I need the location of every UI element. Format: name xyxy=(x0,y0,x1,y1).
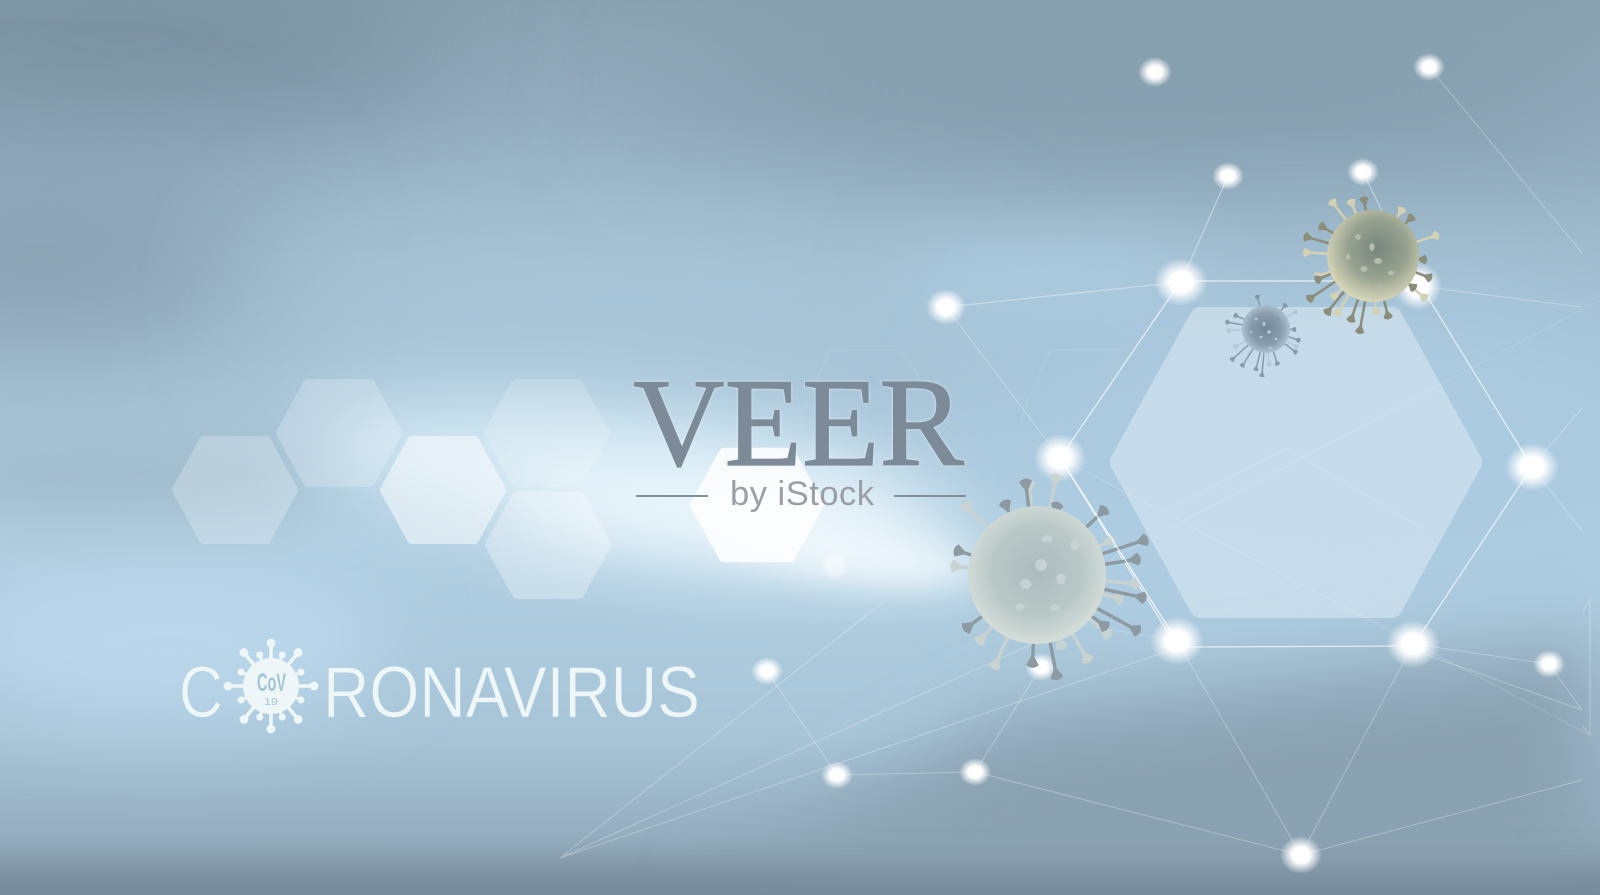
VEER wordmark: VEER xyxy=(633,354,964,493)
medium virus xyxy=(1302,196,1440,335)
coronavirus logo xyxy=(179,639,700,733)
hexagon 4 xyxy=(489,384,605,482)
hexagon 2 xyxy=(281,384,397,482)
hexagon 3 xyxy=(385,441,501,539)
large virus xyxy=(950,473,1150,681)
network nodes xyxy=(751,53,1565,874)
hexagon 5 xyxy=(490,496,606,594)
icon: CoV-19 virus: 19 xyxy=(264,697,279,708)
VEER watermark xyxy=(633,354,966,513)
rule left xyxy=(636,495,708,497)
large translucent hexagon xyxy=(1122,319,1470,606)
by iStock: by iStock xyxy=(730,475,875,513)
bright hexagon xyxy=(696,453,818,557)
bright hexagon outline xyxy=(946,172,1532,647)
rule right xyxy=(894,495,966,497)
line over large virus xyxy=(1060,458,1177,641)
hexagon 1 xyxy=(177,441,293,539)
letter C: C xyxy=(179,653,223,733)
small hexagons group xyxy=(177,384,818,594)
faint network lines xyxy=(560,67,1600,858)
small virus xyxy=(1225,294,1301,377)
icon: CoV-19 virus: CoV xyxy=(257,669,286,697)
icon: CoV-19 virus xyxy=(224,639,318,733)
letters RONAVIRUS: RONAVIRUS xyxy=(323,653,700,733)
